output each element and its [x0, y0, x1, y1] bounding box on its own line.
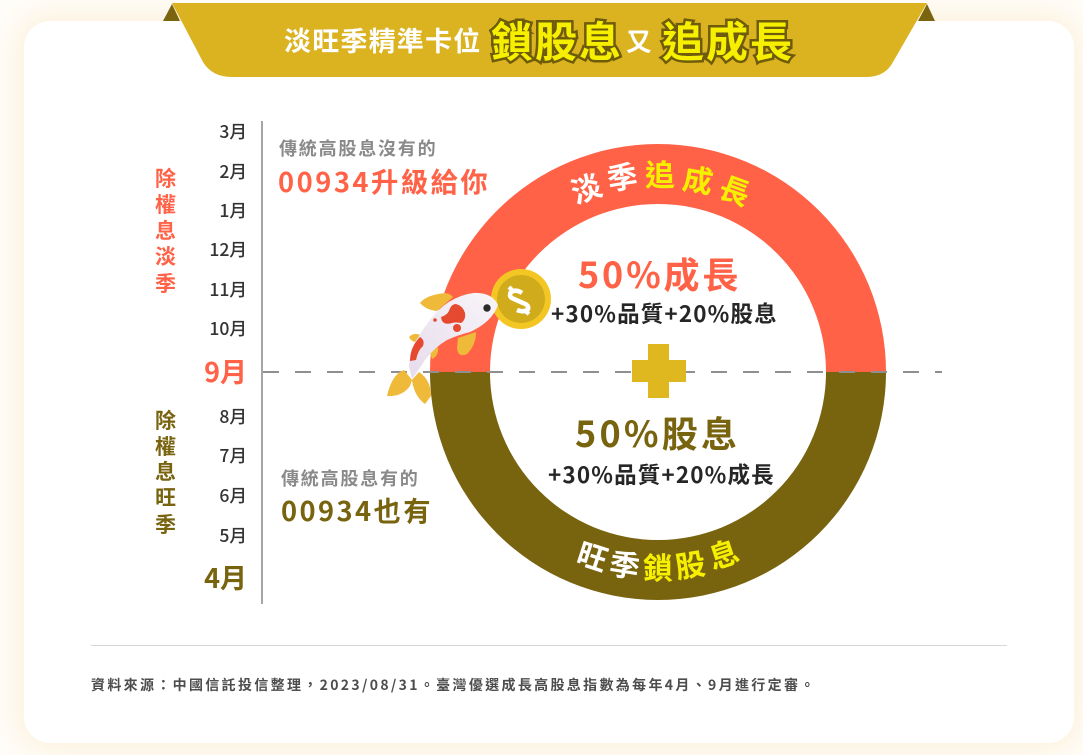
ring: top half growth [430, 144, 886, 372]
ring label top: 追 [645, 160, 675, 193]
footer divider [91, 645, 1007, 646]
vertical label: 除權息淡季: 淡 [155, 246, 176, 269]
title text: 淡旺季精準卡位 [284, 20, 481, 59]
ring label bottom: 鎖 [643, 553, 673, 586]
banner fold right [918, 4, 935, 21]
timeline axis [261, 121, 263, 604]
ring bottom text: +30%品質+20%成長 [548, 458, 775, 490]
ring label top: 長 [715, 171, 754, 213]
ring label bottom: 息 [705, 536, 743, 576]
month labels: 10月 [209, 316, 247, 341]
ring label bottom: 季 [607, 548, 642, 585]
vertical label: 除權息旺季 [155, 409, 176, 537]
highlighted month: 4月: 4月 [204, 557, 247, 596]
text block: peak-season note: 傳統高股息有的 [281, 465, 420, 491]
banner fold left [163, 4, 180, 21]
month labels: 2月 [219, 159, 247, 184]
month labels: 11月 [209, 277, 247, 302]
icon: coin [491, 269, 551, 329]
vertical label: 除權息淡季: 息 [155, 219, 176, 243]
ring label bottom: 股 [673, 548, 708, 585]
banner body [172, 3, 927, 77]
month labels: 8月 [219, 404, 247, 429]
ring label top: 季 [605, 160, 640, 197]
month labels: 3月 [219, 119, 247, 144]
vertical label: 除權息淡季: 權 [155, 194, 176, 217]
icon: plus [632, 344, 686, 398]
text block: off-season note: 傳統高股息沒有的 [279, 135, 437, 161]
month labels: 7月 [219, 443, 247, 468]
title connector: 又: 又 [626, 22, 652, 59]
footer source note: 資料來源：中國信託投信整理，2023/08/31。臺灣優選成長高股息指數為每年4月、9月進行定審。 [91, 675, 817, 695]
dashed divider at 9月 [263, 371, 942, 373]
month labels [209, 119, 247, 548]
vertical label: 除權息淡季 [155, 167, 176, 296]
ring bottom text: 50%股息 [575, 406, 740, 458]
month labels: 1月 [219, 198, 247, 223]
text block: off-season note [278, 135, 490, 200]
month labels: 12月 [209, 237, 247, 262]
ring chart [430, 144, 886, 600]
ring bottom text [548, 406, 775, 490]
ring label top [567, 160, 754, 213]
ring top text [551, 247, 778, 329]
icon: koi fish [387, 293, 498, 404]
title highlight: 追成長: 追成長 [662, 9, 794, 70]
month labels: 6月 [219, 483, 247, 508]
text block: peak-season note: 00934也有 [281, 489, 433, 529]
month labels: 5月 [219, 523, 247, 548]
ring label bottom: 旺 [573, 538, 611, 578]
vertical label: 除權息旺季: 除 [155, 409, 176, 433]
vertical label: 除權息旺季: 權 [155, 436, 176, 459]
vertical label: 除權息旺季: 旺 [155, 487, 176, 510]
ring: bottom half dividend [430, 372, 886, 600]
highlighted month: 9月: 9月 [204, 351, 247, 390]
ring label top: 成 [680, 163, 715, 200]
vertical label: 除權息旺季: 季 [155, 514, 176, 537]
ring label bottom [573, 536, 743, 586]
ring label top: 淡 [567, 169, 606, 211]
text block: off-season note: 00934升級給你 [278, 160, 490, 200]
title highlight: 鎖股息: 鎖股息 [491, 9, 623, 70]
vertical label: 除權息淡季: 除 [155, 167, 176, 191]
vertical label: 除權息旺季: 息 [155, 460, 176, 484]
title banner [163, 3, 935, 77]
text block: peak-season note [281, 465, 433, 529]
ring top text: +30%品質+20%股息 [551, 297, 778, 329]
vertical label: 除權息淡季: 季 [155, 273, 176, 296]
ring top text: 50%成長 [578, 247, 741, 299]
